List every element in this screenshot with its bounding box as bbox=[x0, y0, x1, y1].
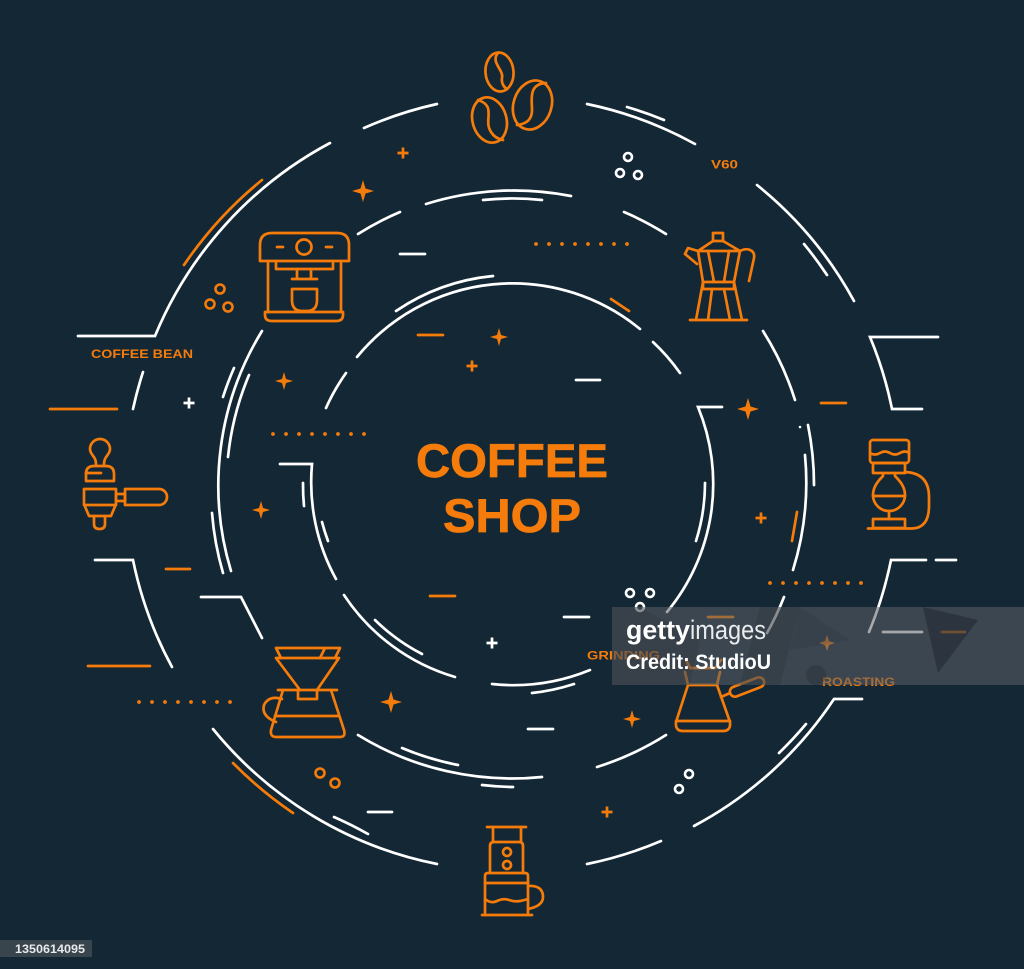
icon: aeropress bbox=[482, 827, 543, 915]
small circle clusters bbox=[206, 153, 693, 793]
labels: ROASTING bbox=[822, 675, 895, 689]
orange accent arcs and dashes bbox=[50, 180, 965, 813]
title bbox=[416, 434, 608, 542]
dotted rows bbox=[137, 242, 863, 704]
icon: cezve bbox=[676, 660, 766, 731]
watermark band bbox=[612, 607, 1024, 685]
title: SHOP bbox=[443, 489, 581, 542]
outer ring arcs bbox=[78, 104, 956, 864]
icon: pour-over dripper bbox=[264, 648, 344, 737]
image id tag: 1350614095 bbox=[15, 944, 86, 956]
icon: coffee beans bbox=[467, 51, 558, 147]
labels bbox=[91, 158, 895, 689]
icon: moka pot bbox=[685, 233, 754, 320]
watermark band: images bbox=[690, 615, 766, 645]
middle ring arcs bbox=[201, 190, 814, 787]
labels: V60 bbox=[711, 158, 738, 172]
sparkle stars bbox=[252, 180, 835, 728]
image id tag bbox=[0, 940, 92, 957]
title: COFFEE bbox=[416, 434, 608, 487]
icon: espresso machine bbox=[260, 233, 349, 321]
labels: COFFEE BEAN bbox=[91, 347, 193, 361]
watermark band: Credit: StudioU bbox=[626, 651, 771, 674]
labels: GRINDING bbox=[587, 648, 660, 662]
inner ring arcs bbox=[280, 276, 722, 693]
watermark band: getty bbox=[626, 615, 690, 645]
icon: portafilter and tamper bbox=[84, 439, 167, 529]
white dashes bbox=[368, 254, 922, 812]
plus marks bbox=[184, 148, 766, 818]
icon: siphon brewer bbox=[868, 440, 929, 528]
